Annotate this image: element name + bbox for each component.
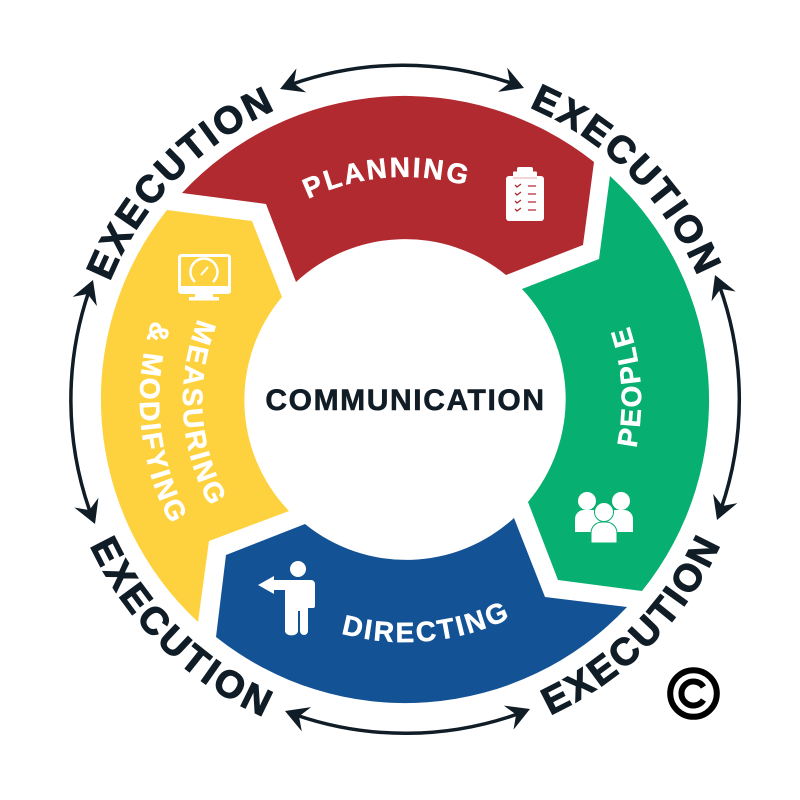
heading: directing: DIRECTING [342,603,508,642]
panel: people segment [522,176,709,591]
icon: clipboard [506,167,544,221]
icon: copyright symbol [670,670,717,717]
heading: measuring: MEASURING [182,320,224,504]
icon: group of people [575,492,633,543]
icon: monitor with gauge [179,256,231,300]
arrow: top double-headed [275,65,529,101]
center label: communication: COMMUNICATION [265,384,546,417]
arrow: bottom double-headed [280,697,535,733]
execution label: top right: EXECUTION [530,84,722,274]
execution label: bottom left: EXECUTION [90,535,274,717]
icon: man pointing with arrow [258,561,315,635]
heading: and modifying: & MODIFYING [140,322,186,522]
panel: planning segment [182,96,594,282]
arrow: left double-headed [71,275,107,529]
panel: measuring and modifying segment [101,210,289,622]
heading: planning: PLANNING [302,157,468,198]
arrow: right double-headed [703,270,739,525]
execution label: bottom right: EXECUTION [540,534,720,716]
execution label: top left: EXECUTION [86,86,274,280]
panel: directing segment [216,518,627,703]
heading: people: PEOPLE [611,326,642,447]
